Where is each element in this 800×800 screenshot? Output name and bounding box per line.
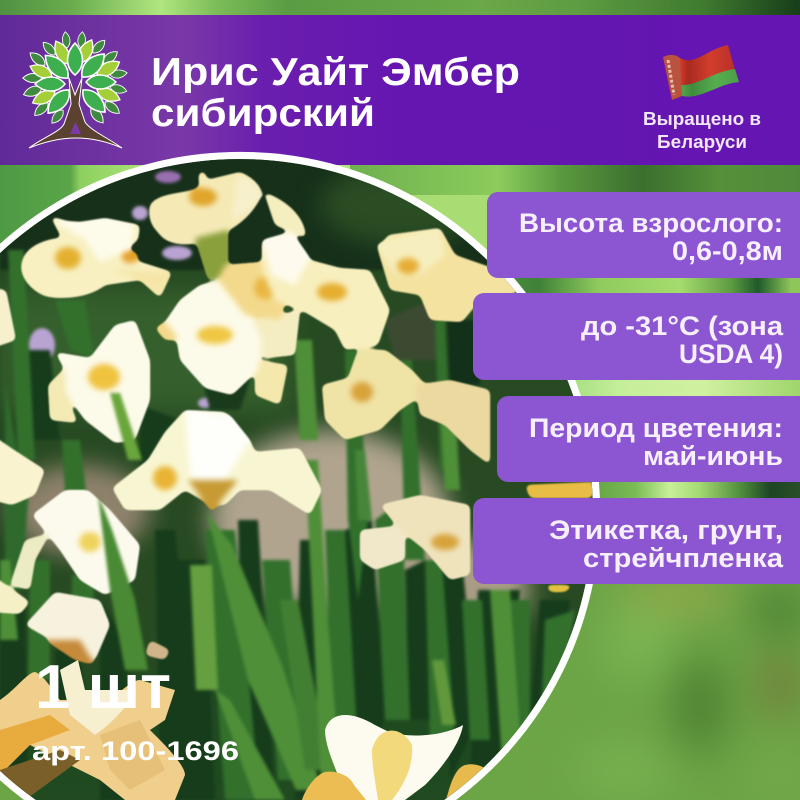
- badge: packaging: [473, 498, 800, 584]
- leaves dark: [0, 300, 570, 800]
- flower center right large: [218, 262, 285, 320]
- header band: [0, 15, 800, 165]
- badge: height: [487, 192, 800, 278]
- leaves light: [0, 340, 522, 800]
- flower central left: [155, 318, 186, 340]
- front leaves: [98, 393, 148, 670]
- article number: арт. 100-1696: [32, 736, 239, 766]
- flower bottom left orange: [0, 672, 185, 800]
- badge: hardiness: USDA 4): [679, 339, 783, 369]
- badge: packaging: Этикетка, грунт,: [549, 515, 783, 545]
- flower mid lower right: [360, 525, 405, 570]
- flowers: [0, 171, 595, 665]
- circular photo of irises: [0, 150, 620, 800]
- photo background and foliage: [0, 150, 620, 800]
- badge: hardiness: до -31°С (зона: [581, 311, 784, 341]
- flower right pair: [378, 228, 520, 322]
- badge: height: Высота взрослого:: [519, 208, 783, 238]
- badge: flowering period: [497, 396, 800, 482]
- tree trunk: [29, 78, 122, 148]
- title: сибирский: [151, 92, 375, 135]
- badge: packaging: стрейчпленка: [583, 543, 784, 573]
- title: [151, 51, 520, 135]
- text: grown in Belarus: [643, 109, 761, 152]
- text: grown in Belarus: Беларуси: [657, 132, 747, 152]
- title: Ирис Уайт Эмбер: [151, 51, 520, 94]
- leaves mid: [8, 250, 575, 800]
- badge: flowering period: май-июнь: [643, 441, 783, 471]
- text: grown in Belarus: Выращено в: [643, 109, 761, 129]
- badge: height: 0,6-0,8м: [672, 236, 783, 266]
- lilac background blooms: [29, 171, 212, 408]
- flower lower left: [10, 533, 50, 590]
- flower stem top: [195, 230, 228, 280]
- icon: Belarus flag: [663, 45, 739, 100]
- logo: tree: [22, 31, 128, 148]
- flower top: [149, 171, 262, 244]
- quantity label: 1 шт: [35, 653, 171, 722]
- left edge flowers: [0, 288, 16, 348]
- flower lower cluster: [322, 350, 430, 440]
- large lower flower: [112, 410, 322, 515]
- flower upper left: [21, 216, 172, 298]
- flower middle left: [48, 368, 78, 423]
- badge: flowering period: Период цветения:: [529, 413, 783, 443]
- flower bottom center: [325, 715, 463, 800]
- tree canopy outer leaves: [22, 31, 128, 126]
- flowers at the bottom edge: [0, 660, 488, 800]
- badge: hardiness: [473, 293, 800, 380]
